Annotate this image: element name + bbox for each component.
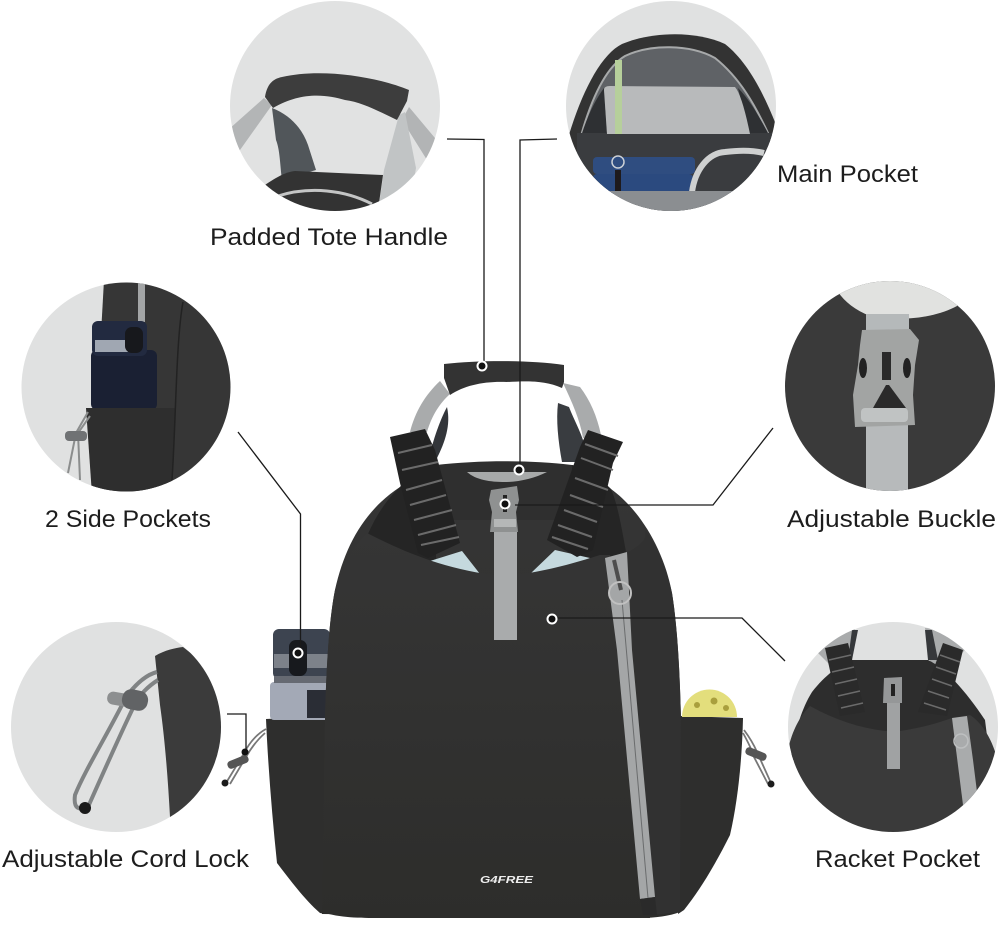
cord lock <box>65 412 90 480</box>
side pocket left <box>266 716 326 914</box>
dark opening band <box>566 34 780 212</box>
front zipper <box>605 552 657 915</box>
front panel <box>786 706 1000 840</box>
panel: main pocket <box>565 0 780 216</box>
bag side <box>92 280 240 495</box>
label: padded tote handle: Padded Tote Handle <box>210 224 448 251</box>
pickleball <box>682 690 737 717</box>
panel: adjustable buckle <box>783 280 997 495</box>
label: side pockets: 2 Side Pockets <box>45 506 211 533</box>
left racket grip <box>390 429 460 558</box>
side pocket <box>86 408 175 495</box>
right cord lock <box>743 730 774 788</box>
laptop <box>604 86 750 134</box>
grey reflective top patch <box>467 472 547 482</box>
elastic cord <box>75 672 158 809</box>
side pocket right <box>678 716 743 914</box>
callout lines and dots <box>227 139 785 756</box>
center buckle and strap <box>489 486 519 640</box>
label: racket pocket: Racket Pocket <box>815 846 980 873</box>
bag top <box>266 171 383 211</box>
cord bead <box>79 802 91 814</box>
backpack illustration <box>222 361 774 918</box>
right upper panel <box>627 530 681 915</box>
front pocket panel <box>322 533 650 918</box>
panel seam <box>172 302 183 480</box>
brand logo: G4FREE <box>480 875 533 886</box>
left cord lock <box>222 729 266 786</box>
strap and buckle <box>883 677 902 769</box>
bag back panel <box>380 461 640 560</box>
back strap <box>232 98 272 150</box>
webbing strap <box>866 314 909 495</box>
white hoop <box>692 151 764 192</box>
water bottle <box>91 321 157 410</box>
handle straps <box>818 628 965 664</box>
label: cord lock: Adjustable Cord Lock <box>2 846 250 873</box>
water bottle <box>270 629 330 720</box>
right racket grip <box>924 643 963 711</box>
padded handle <box>444 361 564 395</box>
right racket grip <box>547 430 623 557</box>
green pole <box>615 60 622 134</box>
denim folded <box>593 157 695 194</box>
panel: adjustable cord lock <box>10 620 225 834</box>
lower mesh pocket <box>577 133 772 193</box>
racket opening shadow <box>368 465 626 572</box>
keyring <box>612 156 624 193</box>
light top patch <box>838 280 960 319</box>
bottom floor <box>610 191 732 211</box>
strap stripe <box>138 282 145 322</box>
left racket grip <box>825 643 863 709</box>
back panel <box>790 660 990 760</box>
zipper <box>952 716 978 805</box>
panel: padded tote handle <box>228 0 445 220</box>
racket faces <box>430 550 590 574</box>
interior side shadow <box>582 88 768 133</box>
bag edge <box>155 647 225 817</box>
dark inner strap <box>272 108 316 180</box>
cord lock toggle <box>107 689 148 711</box>
right tote strap <box>557 383 601 462</box>
interior top padding <box>578 47 768 212</box>
buckle <box>853 329 919 427</box>
padded handle <box>265 73 409 120</box>
panel: racket pocket <box>786 620 1000 840</box>
right straps <box>406 107 435 158</box>
label: adjustable buckle: Adjustable Buckle <box>787 506 996 533</box>
label: main pocket: Main Pocket <box>777 161 918 188</box>
bag main body <box>322 487 681 918</box>
left tote strap <box>410 381 450 458</box>
panel: side pockets <box>20 280 240 495</box>
